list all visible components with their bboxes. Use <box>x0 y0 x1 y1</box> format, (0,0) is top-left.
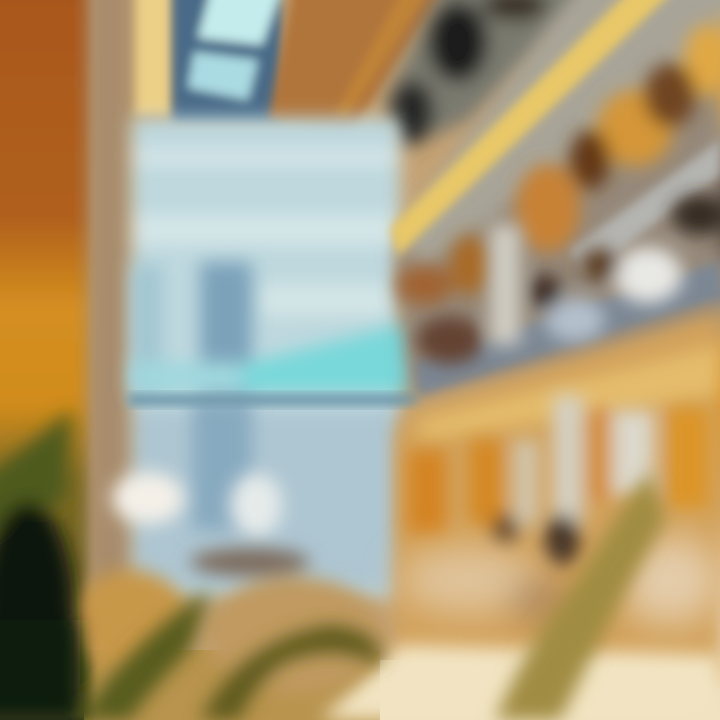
lower floor tables <box>400 536 720 624</box>
window glass <box>132 118 400 598</box>
pale yellow pillar <box>136 0 174 115</box>
cream floor <box>320 645 720 720</box>
right edge colours <box>690 0 720 720</box>
left orange wall <box>0 0 92 720</box>
base dark plant colour <box>0 650 84 720</box>
window mullion <box>128 394 418 406</box>
wooden ceiling <box>268 0 458 135</box>
grey column <box>88 0 132 600</box>
grey shelf band <box>415 140 720 395</box>
yellow beam <box>390 0 695 256</box>
wooden seating behind plant <box>72 548 383 693</box>
plant: blurred foreground stalk <box>495 470 665 720</box>
lower shelf objects <box>416 195 720 364</box>
dark ceiling void <box>385 0 620 150</box>
skylight <box>172 0 288 125</box>
base seating colour <box>80 650 380 720</box>
plant: dark leaves <box>0 410 380 720</box>
tower in window <box>132 262 252 530</box>
white blobs <box>112 472 282 537</box>
right upper wall <box>395 0 720 400</box>
cyan band <box>132 325 416 392</box>
lower right warm wall <box>395 310 720 680</box>
shelf items <box>397 24 720 305</box>
base floor colour <box>380 660 720 720</box>
counter items <box>408 395 708 566</box>
